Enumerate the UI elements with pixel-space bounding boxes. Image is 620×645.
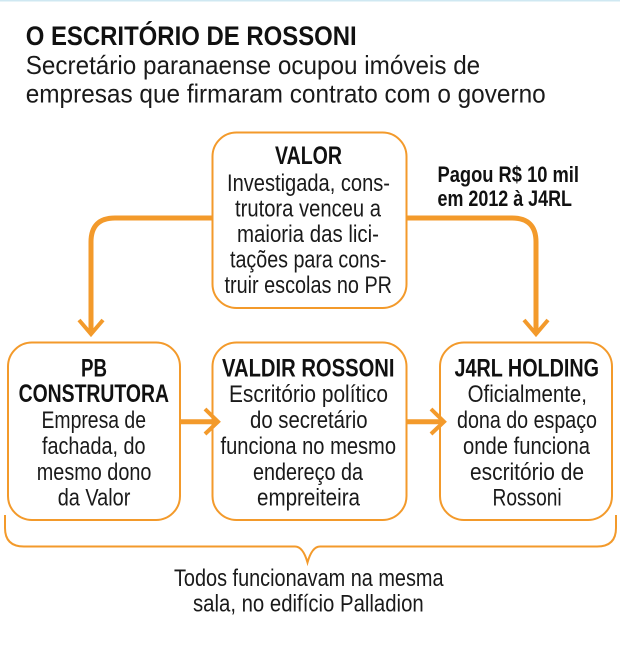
title: O ESCRITÓRIO DE ROSSONI	[26, 20, 357, 51]
panel: J4RL Holding: Rossoni	[492, 485, 562, 512]
panel: Valdir Rossoni: Escritório político	[229, 381, 388, 408]
panel: J4RL Holding: escritório de	[470, 459, 584, 486]
panel: Valor: trutora venceu a	[235, 196, 382, 223]
arrow: Valor to PB Construtora	[79, 218, 212, 334]
arrow: Valdir Rossoni to J4RL Holding	[406, 409, 444, 434]
panel: Valor: maioria das lici-	[237, 221, 379, 248]
panel: Valor: Investigada, cons-	[227, 170, 390, 197]
panel: Valdir Rossoni: funciona no mesmo	[220, 433, 396, 460]
panel: PB Construtora: PB	[81, 355, 107, 383]
panel: PB Construtora	[8, 342, 180, 520]
caption: sala, no edifício Palladion	[193, 591, 424, 618]
panel: Valdir Rossoni: empreiteira	[257, 485, 361, 512]
panel: J4RL Holding: Oficialmente,	[468, 381, 587, 408]
payment note: Pagou R$ 10 mil	[438, 162, 579, 187]
panel: Valor: truir escolas no PR	[224, 272, 392, 299]
panel: PB Construtora: CONSTRUTORA	[19, 380, 169, 408]
panel: Valor	[212, 132, 406, 308]
panel: Valdir Rossoni: endereço da	[253, 459, 364, 486]
subtitle: Secretário paranaense ocupou imóveis de	[26, 50, 480, 80]
panel: PB Construtora: Empresa de	[42, 407, 146, 434]
panel: Valdir Rossoni: do secretário	[250, 407, 368, 434]
panel: J4RL Holding	[440, 342, 612, 520]
panel: Valor: VALOR	[275, 142, 342, 170]
subtitle	[26, 50, 546, 109]
subtitle: empresas que firmaram contrato com o governo	[26, 79, 546, 109]
panel: J4RL Holding: onde funciona	[463, 433, 591, 460]
panel: Valor: tações para cons-	[230, 247, 386, 274]
caption	[174, 565, 444, 618]
payment note	[438, 162, 579, 211]
arrow: Valor to J4RL Holding	[406, 218, 548, 334]
panel: PB Construtora: mesmo dono	[37, 459, 151, 486]
panel: Valdir Rossoni	[212, 342, 406, 520]
caption: Todos funcionavam na mesma	[174, 565, 444, 592]
brace	[5, 515, 616, 562]
panel: PB Construtora: da Valor	[58, 485, 130, 512]
panel: PB Construtora: fachada, do	[42, 433, 146, 460]
payment note: em 2012 à J4RL	[438, 186, 572, 211]
panel: Valdir Rossoni: VALDIR ROSSONI	[222, 355, 394, 383]
arrow: PB Construtora to Valdir Rossoni	[180, 409, 218, 434]
